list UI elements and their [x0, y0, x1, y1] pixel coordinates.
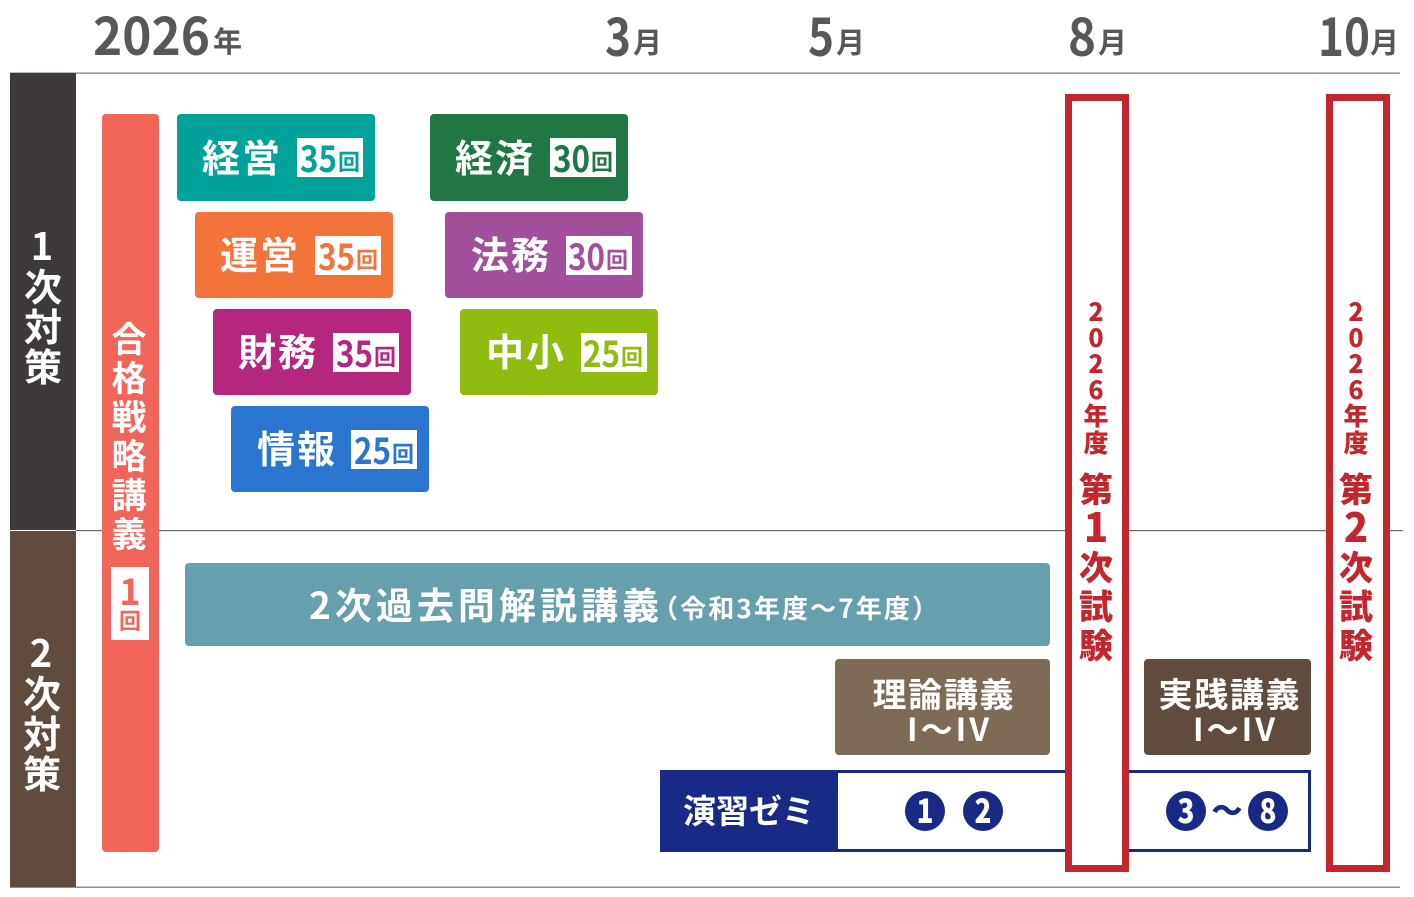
- vertical bar: 合格戦略講義 1回: 戦: [111, 390, 147, 441]
- exam column: 2026年度 第2次試験: 2: [1344, 496, 1368, 554]
- seminar numbers 1 and 2: 2: [974, 785, 992, 833]
- timeline header: 3月: 月: [633, 20, 662, 62]
- course: 運営 35回: 運営: [220, 225, 300, 280]
- exam column: 2026年度 第2次試験: 年: [1343, 397, 1369, 433]
- seminar: 演習ゼミ: 演習ゼミ: [683, 785, 815, 833]
- course: 情報 25回: 25: [354, 423, 391, 475]
- timeline header: 3月: [605, 0, 662, 71]
- exam column: 2026年度 第1次試験: 1: [1084, 496, 1108, 554]
- course: 法務 30回: 回: [606, 243, 628, 275]
- course: 経営 35回: [177, 114, 375, 201]
- box: 実践講義 I～IV: 実践講義: [1158, 668, 1300, 717]
- course: 情報 25回: 情報: [257, 419, 337, 474]
- course: 中小 25回: [460, 309, 658, 395]
- course: 経済 30回: [430, 114, 628, 201]
- course: 情報 25回: [231, 406, 429, 492]
- bar: 2次過去問解説講義: （令和3年度～7年度）: [652, 589, 938, 626]
- timeline header: 10月: 月: [1370, 20, 1399, 62]
- timeline header: 5月: 月: [836, 20, 865, 62]
- exam column: 2026年度 第2次試験: [1330, 98, 1386, 868]
- vertical bar: 合格戦略講義 1回: 1: [119, 564, 141, 616]
- exam column: 2026年度 第2次試験: 試: [1339, 580, 1373, 629]
- course: 財務 35回: 35: [336, 326, 373, 378]
- course: 法務 30回: 法務: [471, 225, 551, 280]
- side label: 1次対策: 対: [24, 297, 62, 352]
- exam column: 2026年度 第2次試験: 第: [1339, 463, 1373, 512]
- seminar numbers 3 to 8: ～: [1212, 786, 1242, 831]
- course: 運営 35回: 回: [356, 243, 378, 275]
- seminar numbers 3 to 8: 8: [1260, 785, 1276, 833]
- vertical bar: 合格戦略講義 1回: [102, 114, 159, 852]
- course: 経営 35回: 35: [300, 131, 337, 183]
- exam column: 2026年度 第1次試験: 度: [1083, 424, 1109, 460]
- course: 法務 30回: [445, 212, 643, 298]
- box: 実践講義 I～IV: I～IV: [1193, 705, 1275, 751]
- vertical bar: 合格戦略講義 1回: 義: [111, 507, 147, 558]
- side label: 1次対策: 策: [24, 337, 62, 392]
- course: 経営 35回: 回: [338, 145, 360, 177]
- course: 財務 35回: 回: [374, 340, 396, 372]
- exam column: 2026年度 第1次試験: 次: [1079, 541, 1113, 590]
- exam column: 2026年度 第1次試験: 第: [1079, 463, 1113, 512]
- side label: 2次対策: 次: [23, 664, 61, 719]
- exam column: 2026年度 第1次試験: 2: [1088, 345, 1104, 381]
- exam column: 2026年度 第2次試験: 6: [1348, 371, 1364, 407]
- side label: 2次対策: 策: [23, 744, 61, 799]
- seminar: 演習ゼミ: [660, 770, 1310, 852]
- vertical bar: 合格戦略講義 1回: 格: [111, 351, 147, 402]
- box: 実践講義 I～IV: [1144, 659, 1311, 755]
- seminar numbers 3 to 8: [1166, 785, 1288, 833]
- seminar numbers 3 to 8: 3: [1178, 785, 1194, 833]
- course: 中小 25回: 中小: [486, 322, 566, 377]
- course: 財務 35回: 財務: [238, 322, 318, 377]
- course: 情報 25回: 回: [392, 437, 414, 469]
- side label: 2次対策: 2: [30, 623, 52, 678]
- timeline header: 5月: [808, 0, 865, 71]
- side label: 2次対策: 対: [23, 704, 61, 759]
- course: 運営 35回: [195, 212, 393, 298]
- box: 理論講義 I～IV: [835, 659, 1050, 755]
- exam column: 2026年度 第2次試験: 験: [1339, 619, 1373, 668]
- course: 中小 25回: 25: [583, 326, 620, 378]
- course: 経営 35回: 経営: [202, 128, 282, 183]
- exam column: 2026年度 第2次試験: 2: [1348, 345, 1364, 381]
- bar: 2次過去問解説講義: 2次過去問解説講義: [309, 576, 659, 630]
- exam column: 2026年度 第1次試験: 年: [1083, 397, 1109, 433]
- box: 理論講義 I～IV: 理論講義: [872, 668, 1014, 717]
- exam column: 2026年度 第1次試験: 試: [1079, 580, 1113, 629]
- course: 法務 30回: 30: [568, 229, 605, 281]
- course: 財務 35回: [213, 309, 411, 395]
- timeline header: 2026年: 年: [213, 19, 242, 61]
- vertical bar: 合格戦略講義 1回: 合: [111, 312, 147, 363]
- vertical bar: 合格戦略講義 1回: 講: [111, 468, 147, 519]
- bar: 2次過去問解説講義: [185, 563, 1050, 646]
- side label: 1次対策: [10, 73, 76, 530]
- course: 運営 35回: 35: [318, 229, 355, 281]
- course: 中小 25回: 回: [621, 340, 643, 372]
- course: 経済 30回: 回: [591, 145, 613, 177]
- exam column: 2026年度 第1次試験: [1068, 98, 1126, 868]
- timeline header: 8月: 月: [1098, 20, 1127, 62]
- exam column: 2026年度 第2次試験: 度: [1343, 424, 1369, 460]
- side label: 1次対策: 次: [24, 257, 62, 312]
- timeline header: 8月: [1068, 0, 1127, 71]
- seminar numbers 1 and 2: [905, 785, 1003, 833]
- exam column: 2026年度 第2次試験: 0: [1348, 319, 1364, 355]
- course: 経済 30回: 経済: [455, 128, 535, 183]
- vertical bar: 合格戦略講義 1回: 回: [119, 604, 141, 636]
- vertical bar: 合格戦略講義 1回: 略: [111, 429, 147, 480]
- box: 理論講義 I～IV: I～IV: [907, 705, 989, 751]
- exam column: 2026年度 第1次試験: 験: [1079, 619, 1113, 668]
- exam column: 2026年度 第2次試験: 2: [1348, 293, 1364, 329]
- side label: 2次対策: [10, 531, 76, 887]
- exam column: 2026年度 第2次試験: 次: [1339, 541, 1373, 590]
- side label: 1次対策: 1: [31, 216, 53, 271]
- exam column: 2026年度 第1次試験: 0: [1088, 319, 1104, 355]
- exam column: 2026年度 第1次試験: 6: [1088, 371, 1104, 407]
- exam column: 2026年度 第1次試験: 2: [1088, 293, 1104, 329]
- course: 経済 30回: 30: [553, 131, 590, 183]
- seminar numbers 1 and 2: 1: [916, 785, 934, 833]
